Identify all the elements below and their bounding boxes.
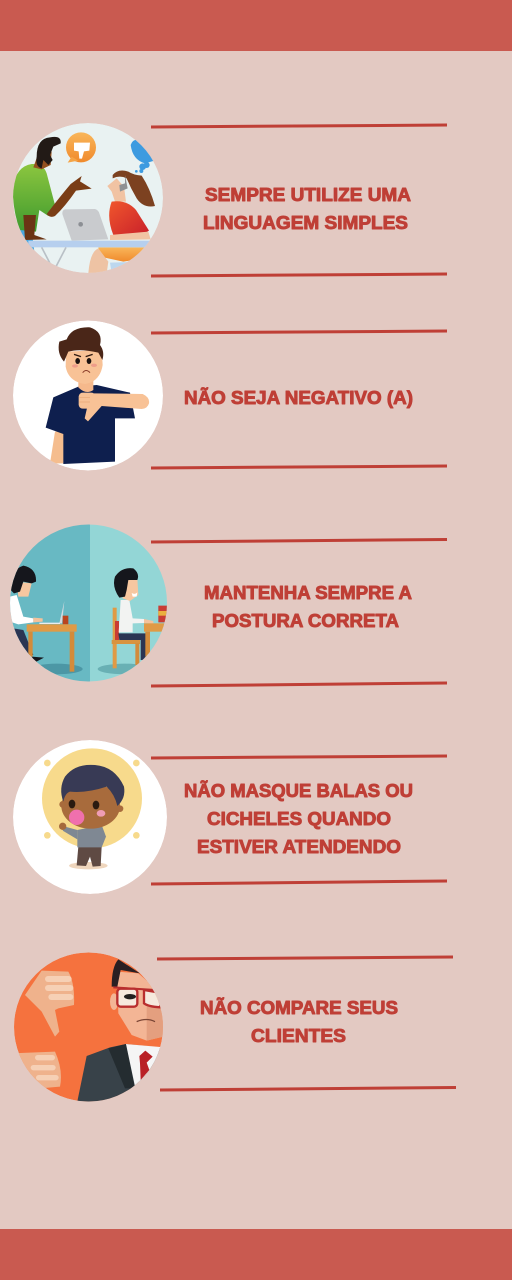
- text: não compare: [200, 997, 398, 1046]
- top line: [151, 756, 447, 758]
- bottom band: [0, 1229, 512, 1280]
- bottom line: [151, 683, 447, 686]
- text: mantenha postura: POSTURA CORRETA: [212, 610, 399, 631]
- text: balas e cicheles: ESTIVER ATENDENDO: [197, 836, 401, 857]
- text: balas e cicheles: [184, 780, 413, 857]
- top line: [151, 125, 447, 127]
- text: não compare: NÃO COMPARE SEUS: [200, 997, 398, 1018]
- icon: wrong and right sitting posture: [10, 524, 167, 682]
- icon: businessman and thumbs down: [13, 952, 163, 1103]
- text: balas e cicheles: NÃO MASQUE BALAS OU: [184, 780, 413, 801]
- panel: não compare clientes: [13, 952, 456, 1103]
- panel: linguagem simples: [13, 123, 447, 276]
- text: sempre utilize: [203, 184, 411, 233]
- panel: não seja negativo: [13, 320, 447, 470]
- panel: postura correta: [5, 520, 447, 690]
- text: balas e cicheles: CICHELES QUANDO: [207, 808, 391, 829]
- text: mantenha postura: MANTENHA SEMPRE A: [204, 582, 412, 603]
- bottom line: [151, 274, 447, 276]
- top line: [151, 540, 447, 542]
- bottom line: [151, 466, 447, 468]
- top band: [0, 0, 512, 51]
- text: mantenha postura: [204, 582, 412, 631]
- text: não seja negativo: NÃO SEJA NEGATIVO (A): [184, 387, 413, 408]
- bottom line: [151, 881, 447, 884]
- text: não compare: CLIENTES: [251, 1025, 346, 1046]
- top line: [157, 957, 453, 959]
- icon: man and woman at a laptop: [13, 123, 163, 273]
- icon: man with thumb down: [13, 320, 163, 470]
- top line: [151, 331, 447, 333]
- bottom line: [160, 1088, 456, 1090]
- text: sempre utilize: SEMPRE UTILIZE UMA: [205, 184, 411, 205]
- icon: boy blowing bubble gum: [13, 740, 167, 894]
- panel: balas e chicletes: [13, 740, 447, 894]
- text: sempre utilize: LINGUAGEM SIMPLES: [203, 212, 408, 233]
